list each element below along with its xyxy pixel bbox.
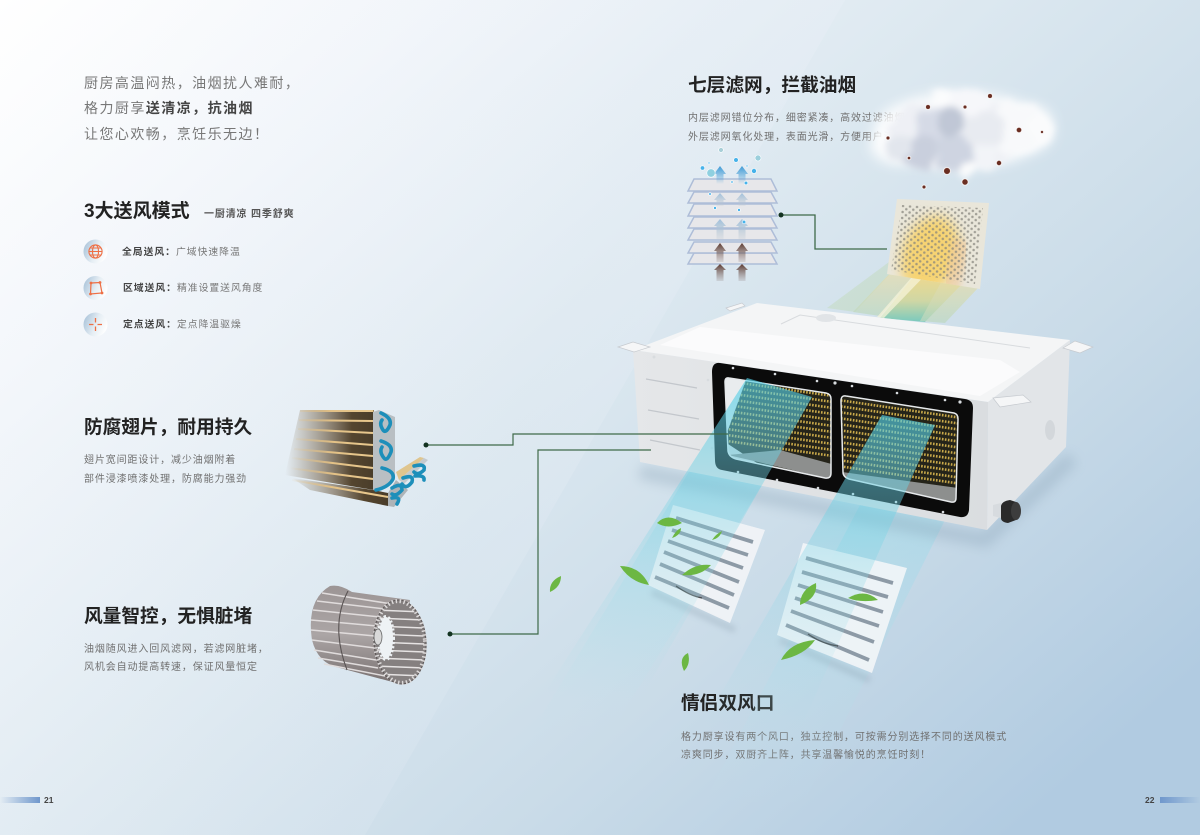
page number right: 22 (1145, 795, 1155, 805)
air outlet vent left (648, 505, 765, 630)
side louvers (646, 379, 700, 450)
shadow (640, 458, 1072, 540)
section text: seven-layer filter: 内层滤网错位分布，细密紧凑，高效过滤油烟 (688, 111, 905, 124)
window right coil (842, 396, 958, 502)
airflow: warm stream from filter to unit (827, 262, 978, 323)
section text: twin air outlets: 凉爽同步，双厨齐上阵，共享温馨愉悦的烹饪时刻！ (681, 748, 931, 761)
section text: anti-corrosion fins: 翅片宽间距设计，减少油烟附着 (84, 453, 236, 466)
section text: smart airflow: 油烟随风进入回风滤网，若滤网脏堵， (84, 642, 269, 655)
section text: twin air outlets: 格力厨享设有两个风口，独立控制，可按需分别选择不同的送风模式 (681, 730, 1007, 743)
intro text block: 格力厨享送清凉，抗油烟 (84, 100, 254, 116)
water droplets (700, 148, 761, 224)
blue coil tubes (376, 413, 424, 504)
heading: 3 air supply modes: 3大送风模式 (84, 200, 190, 222)
front face (633, 350, 988, 530)
section text: twin air outlets (681, 692, 1007, 761)
section text: seven-layer filter: 外层滤网氧化处理，表面光滑，方便用户清洗 (688, 130, 905, 143)
window left coil (726, 378, 830, 478)
connector: filter stack to filter panel (778, 212, 887, 249)
mode: zone air supply: 区域送风：精准设置送风角度 (123, 281, 263, 294)
blue arrows (714, 166, 748, 184)
section text: seven-layer filter (688, 74, 905, 143)
section text: smart airflow (84, 606, 269, 673)
air conditioner unit (618, 303, 1093, 540)
oil particles (886, 94, 1044, 189)
leaves (550, 518, 878, 671)
icon: cloud of oil smoke (870, 84, 1054, 189)
heading: 3 air supply modes (84, 200, 294, 222)
section text: twin air outlets: 情侣双风口 (681, 692, 774, 714)
short fin section (396, 457, 424, 480)
top face (633, 303, 1070, 402)
page number right (1145, 795, 1200, 805)
intro text block: 厨房高温闷热，油烟扰人难耐， (84, 75, 300, 91)
section text: smart airflow: 风量智控，无惧脏堵 (84, 606, 252, 626)
mode: zone air supply (84, 276, 263, 300)
section text: anti-corrosion fins: 防腐翅片，耐用持久 (84, 416, 252, 438)
fan hub gear (379, 617, 393, 659)
brown arrows (714, 243, 748, 281)
icon: seven-layer filter stack (688, 148, 777, 281)
right side (987, 340, 1070, 530)
airflow: soft outer streams below unit (530, 470, 945, 810)
mode: fixed-point air supply (84, 312, 242, 336)
intro text block (84, 75, 300, 142)
connector: fan to unit (448, 450, 651, 636)
list: air supply modes (84, 240, 263, 336)
black frame (712, 363, 973, 517)
mode: fixed-point air supply: 定点送风：定点降温驱燥 (123, 318, 242, 330)
connector: fins to unit (424, 434, 728, 448)
heading: 3 air supply modes: 一厨清凉 四季舒爽 (204, 207, 294, 220)
section text: anti-corrosion fins (84, 416, 252, 485)
fin end plate (373, 410, 395, 490)
pale arrows (714, 193, 748, 240)
fan front opening (371, 598, 429, 686)
screws (652, 356, 962, 513)
icon: centrifugal fan (311, 586, 429, 686)
filter panel (887, 199, 989, 289)
mode: global air supply: 全局送风：广域快速降温 (122, 245, 241, 258)
section text: seven-layer filter: 七层滤网，拦截油烟 (688, 74, 856, 96)
section text: smart airflow: 风机会自动提高转速，保证风量恒定 (84, 660, 258, 673)
section text: anti-corrosion fins: 部件浸漆喷漆处理，防腐能力强劲 (84, 472, 247, 485)
intro text block: 让您心欢畅，烹饪乐无边！ (84, 126, 269, 142)
icon: heat exchanger fins (285, 410, 428, 507)
air outlet vent right (777, 543, 907, 680)
page number left: 21 (44, 795, 54, 805)
layers (688, 179, 777, 264)
knob (993, 500, 1021, 523)
mode: global air supply (84, 240, 241, 264)
page number left (0, 795, 54, 805)
window frames (725, 378, 958, 502)
airflow: cool streams from unit to vents (540, 378, 935, 730)
mounting tabs (618, 303, 1093, 407)
